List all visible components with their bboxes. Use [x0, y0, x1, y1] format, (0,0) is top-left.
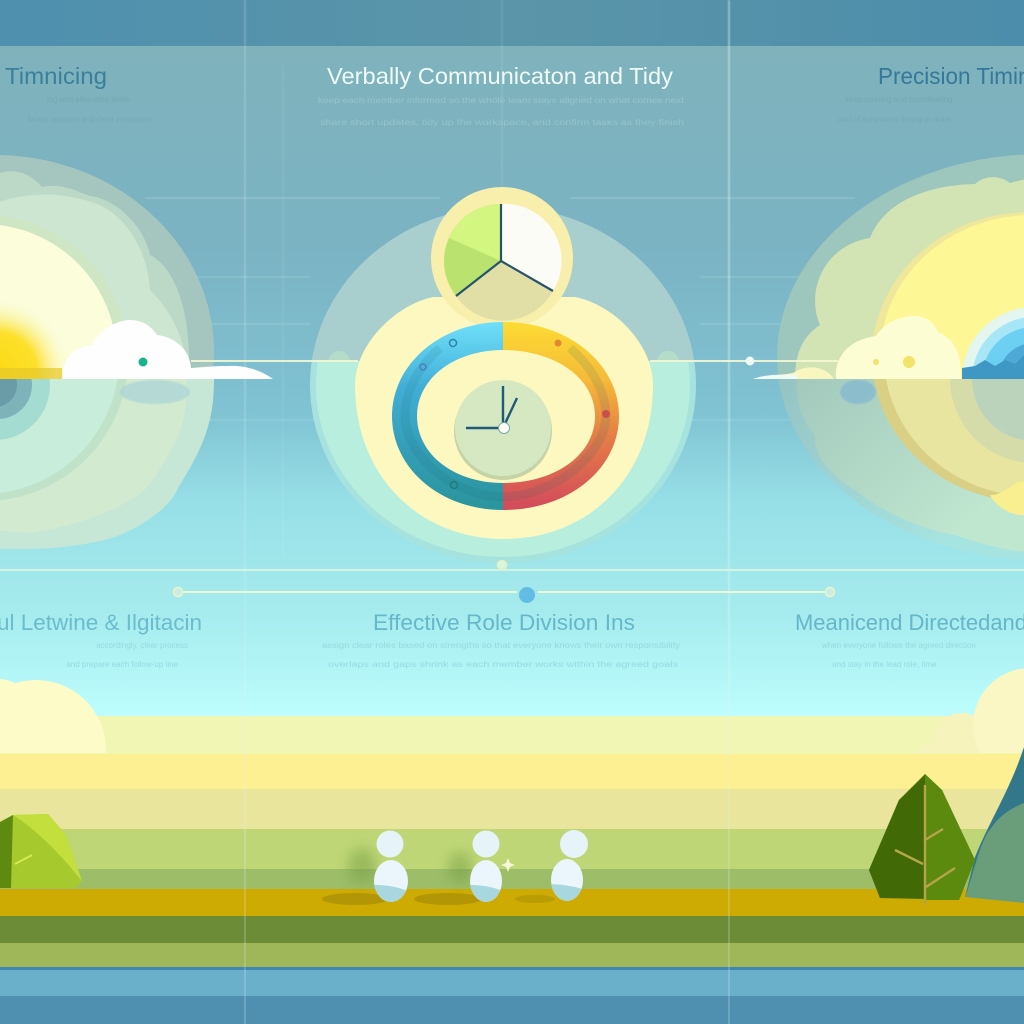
lower body text: left column: accordingly, clear process	[96, 641, 188, 650]
body text: centre column: share short updates, tidy up the workspace, and confirm tasks as they finish	[320, 118, 684, 127]
upper layered cloud	[777, 154, 1024, 379]
pie slice: white	[501, 204, 562, 291]
white cloud on horizon	[63, 320, 273, 379]
lower body text: centre column: overlaps and gaps shrink as each member works within the agreed goals	[328, 660, 678, 669]
bush: left	[0, 814, 82, 888]
figure: person 3	[515, 830, 588, 905]
cream cloud on horizon	[836, 316, 961, 379]
body text: right column: keep running and coordinating	[845, 95, 953, 104]
centre yellow body	[355, 297, 653, 539]
tree	[869, 774, 975, 905]
horizon line	[191, 360, 838, 362]
body text: right column	[838, 95, 953, 124]
blue milestone marker	[519, 587, 535, 603]
pie slice: green	[444, 204, 501, 296]
lower heading: right column: Meanicend Directedand	[795, 610, 1024, 635]
body text: centre column	[318, 96, 685, 127]
clock	[454, 380, 552, 480]
colour ring	[392, 322, 619, 510]
lower layered cloud reflection	[0, 379, 214, 550]
lower heading: left column: ul Letwine & Ilgitacin	[0, 610, 202, 635]
clock centre	[498, 422, 510, 434]
body text: left column: ing and allocating tasks	[47, 95, 130, 104]
lower body text: left column: and prepare each follow-up line	[66, 660, 179, 669]
lower layered cloud reflection	[778, 379, 1024, 560]
heading: left column: Timnicing	[5, 63, 107, 89]
rainbow dome	[962, 308, 1024, 379]
top header band	[0, 0, 1024, 46]
lower body text: right column	[821, 641, 976, 669]
pie slice: tan	[456, 261, 553, 321]
teal dot	[138, 358, 148, 366]
clock hands	[466, 386, 517, 428]
figure: person 1	[322, 830, 410, 905]
body text: left column: timely updates and clear reminders	[27, 115, 152, 124]
body text: left column	[27, 95, 152, 124]
landscape bands	[0, 716, 1024, 1024]
lower body text: centre column	[322, 641, 680, 669]
lower body text: right column: when everyone follows the agreed direction	[821, 641, 976, 650]
lower body text: right column: and stay in the lead role, time	[832, 660, 937, 669]
upper layered cloud	[0, 155, 214, 379]
ring right half	[503, 322, 619, 510]
left cloud sun graphic	[0, 155, 273, 549]
centre background circle	[310, 207, 696, 563]
horizon node	[746, 356, 754, 366]
lower heading: centre column: Effective Role Division Ins	[373, 610, 635, 635]
lower body text: left column	[66, 641, 188, 669]
ring left half	[392, 322, 503, 510]
left ground cloud	[0, 679, 106, 753]
pie chart dial	[431, 187, 573, 329]
right cloud sun graphic	[753, 154, 1024, 560]
figure: person 2	[414, 830, 505, 905]
figure shadows on grass	[348, 848, 472, 884]
body text: centre column: keep each member informed so the whole team stays aligned on what comes next	[318, 96, 685, 105]
vertical guides over ground	[245, 680, 729, 1024]
heading: centre column: Verbally Communicaton and Tidy	[327, 63, 674, 89]
timeline rule	[0, 569, 1024, 571]
sparkle	[501, 858, 515, 872]
lower body text: centre column: assign clear roles based on strengths so that everyone knows their own responsibility	[322, 641, 680, 650]
milestone line	[174, 587, 834, 603]
rule node	[498, 560, 506, 570]
yellow dots	[873, 356, 915, 368]
hill: right	[965, 747, 1024, 903]
small bottom cloud	[990, 482, 1024, 515]
body text: right column: and of schedules timing in order	[838, 115, 952, 124]
right ground cloud	[950, 668, 1024, 753]
